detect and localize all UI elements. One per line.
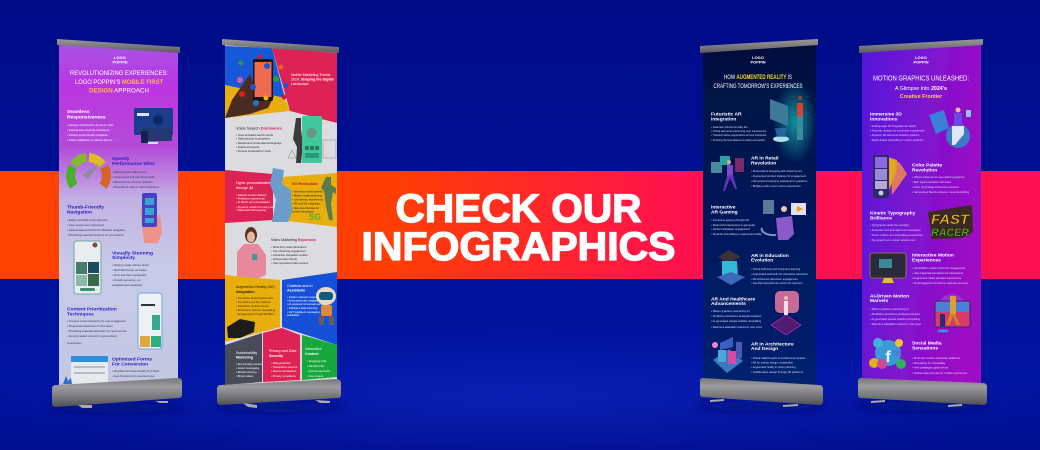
section: kinetic typography: Brilliance: [870, 216, 892, 222]
icon: speedometer gauge: [71, 158, 106, 186]
floor shadow: [48, 403, 188, 413]
panel: augmented reality integration: [225, 275, 280, 342]
title: MOTION GRAPHICS UNLEASHED:: [873, 76, 969, 82]
section: AR in education: • Virtual field trips and immersive learning: [751, 267, 801, 271]
top rail: [859, 39, 983, 53]
icon: AI motion characters: [935, 294, 970, 332]
section: interactive motion: Interactive Motion: [912, 252, 954, 258]
panel: chatbots and AI assistants: [282, 272, 337, 345]
section: interactive AR gaming: • Dynamic storytelling in augmented reality: [711, 232, 762, 236]
section: speedy performance wins: Performance Wins: [112, 161, 155, 167]
panel: sustainability marketing: • Ethical sourcing: [236, 370, 257, 374]
section: kinetic typography: Kinetic Typography: [870, 210, 916, 216]
section: kinetic typography: • Innovative font animations for messaging: [870, 228, 921, 232]
panel: chatbots and AI assistants: • Intelligent lead nurturing: [287, 306, 318, 310]
icon: AR gamer: [762, 200, 806, 240]
section: interactive motion: [912, 252, 969, 285]
section: social media sensations: • Viral challenges ignite trends: [912, 366, 949, 370]
logo: LOGO: [114, 55, 126, 60]
section: social media sensations: • Vertical video formats for mobile experiences: [912, 371, 968, 375]
section: AR and healthcare: Advancements: [711, 301, 746, 307]
section: voice search dominance: • Voice-activated search trends: [236, 133, 274, 137]
section: immersive 3D innovations: • Futuristic designs for immersive experiences: [870, 128, 925, 132]
panel: privacy and data security: Security: [269, 354, 283, 358]
section: social media sensations: Social Media: [912, 340, 942, 346]
section: video marketing expansion: • User-generated video content: [271, 261, 308, 265]
top rail: [700, 39, 818, 53]
panel: sustainability marketing: [225, 333, 264, 385]
panel: augmented reality integration: • Try-before-you-buy features: [236, 300, 272, 304]
section: AI-driven motion: • AI-generated visuals redefine storytelling: [870, 317, 921, 321]
section: AR and healthcare: • Motion graphics powered by AI: [711, 309, 750, 313]
section: seamless responsiveness: Seamless: [67, 109, 90, 115]
section: visually stunning simplicity: • Crisp and clean typography: [112, 273, 147, 277]
panel: hyper-personalization: through AI: [236, 186, 253, 190]
icon: hologram with person: [770, 96, 803, 142]
section: immersive 3D innovations: [870, 112, 925, 142]
icon: hand holding phone with app icons: [225, 54, 288, 118]
section: speedy performance wins: • Minimized use of heavy graphics: [112, 180, 153, 184]
panel: 5G revolution: • AR and VR integration: [292, 202, 321, 206]
title: CRAFTING TOMORROW'S EXPERIENCES: [714, 84, 802, 90]
teal glow: [773, 80, 817, 164]
section: immersive 3D innovations: • Dynamic 3D elements redefine graphics: [870, 133, 920, 137]
section: video marketing expansion: [271, 238, 316, 265]
section: optimized forms: Optimized Forms: [112, 356, 152, 362]
section: immersive 3D innovations: Innovations: [870, 116, 898, 122]
icon: AR architecture model: [712, 337, 743, 373]
icon: phone with content cards: [138, 293, 162, 349]
section: interactive AR gaming: • Global multiplayer engagement: [711, 227, 750, 231]
panel background: [862, 44, 981, 385]
panel: interactive content: • Live content: [307, 374, 323, 378]
panel: privacy and data security: • Privacy compliance: [271, 374, 296, 378]
panel: chatbots and AI assistants: • 24/7 intelligent messaging: [287, 310, 320, 314]
section: futuristic AR: • Pushing the boundaries of reality perception: [711, 138, 766, 142]
section: seamless responsiveness: • Designs optimized for all screen sizes: [67, 123, 114, 127]
panel: 5G revolution: 5G: [309, 212, 321, 222]
section: content prioritization: • Content-related content for personalized: [67, 334, 117, 338]
panel: 5G revolution: • New opportunities for: [292, 206, 319, 210]
section: colour palette revolution: • Bold experimentation with hues: [912, 180, 952, 184]
icon: devices: [134, 108, 173, 144]
section: futuristic AR: Integration: [711, 116, 736, 122]
logo: POPPIN: [112, 60, 128, 64]
section: AR in retail: • Bridging online and in-store experiences: [751, 184, 801, 188]
section: AR in architecture: [751, 342, 806, 374]
section: video marketing expansion: • Vertical video format: [271, 257, 297, 261]
section: social media sensations: • Storytelling for shareability: [912, 361, 946, 365]
section: AR in retail: • Augmented product displays for engagement: [751, 174, 806, 178]
panel: hyper-personalization: • Data-informed targeting: [236, 208, 266, 212]
section: kinetic typography: • Text in motion as a storytelling powerhouse: [870, 233, 924, 237]
section: thumb-friendly navigation: • User-centric menu placement: [67, 223, 104, 227]
section: colour palette revolution: Revolution: [912, 168, 937, 174]
section: immersive 3D innovations: • Depth-based storytelling in motion graphics: [870, 138, 924, 142]
section: visually stunning simplicity: Visually Stunning: [112, 250, 153, 256]
panel: interactive content: [302, 335, 337, 380]
panel: chatbots and AI assistants: Assistants: [287, 288, 305, 292]
section: AR in architecture: • Collaborative design through AR platforms: [751, 370, 804, 374]
logo: [112, 55, 128, 64]
section: voice search dominance: [236, 126, 283, 153]
section: AR and healthcare: • Predictive animations anticipate behavior: [711, 314, 762, 318]
section: speedy performance wins: • Lightning-fast loading times: [112, 170, 147, 174]
panel: 5G revolution: [280, 173, 337, 227]
section: visually stunning simplicity: • Visually appealing, yet: [112, 278, 141, 282]
section: AR in retail: Revolution: [751, 160, 776, 166]
icon: AR retail shopper: [711, 156, 744, 191]
icon: social media cluster: [869, 338, 906, 369]
icon: fast racer logo: [928, 205, 973, 239]
section: interactive motion: • Augmented reality elevates experiences: [912, 276, 962, 280]
section: AR and healthcare: [711, 296, 762, 329]
section: AR in retail: • AR-powered shopping assistants for guidance: [751, 179, 808, 183]
main heading: Landscape: [291, 82, 309, 86]
section: interactive AR gaming: Interactive: [711, 204, 736, 210]
section: content prioritization: • Focused content hierarchy for user engagement: [67, 319, 126, 323]
section: AR in retail: [751, 156, 808, 188]
section: interactive AR gaming: • Real-world interactions in gameplay: [711, 223, 756, 227]
title: [873, 76, 969, 100]
section: AI-driven motion: • Real-time adaptation based on user input: [870, 322, 921, 326]
panel: interactive content: Interactive: [305, 347, 322, 351]
panel: augmented reality integration: • Engagement through AR filters: [236, 312, 275, 316]
panel: chatbots and AI assistants: Chatbots and AI: [287, 284, 313, 288]
section: thumb-friendly navigation: Navigation: [67, 210, 92, 216]
section: AR in education: Evolution: [751, 258, 773, 264]
section: voice search dominance: • Featured snippets: [236, 145, 260, 149]
panel: 5G revolution: mobile campaigns: [292, 210, 314, 214]
section: visually stunning simplicity: [112, 250, 153, 287]
section: colour palette revolution: • Harmonious blends enhance visual storytelling: [912, 190, 970, 194]
panel: sustainability marketing: • Brand values: [236, 374, 254, 378]
panel: sustainability marketing: Marketing: [236, 356, 253, 360]
section: colour palette revolution: [912, 162, 970, 194]
headline: INFOGRAPHICS: [362, 225, 676, 269]
hero colour blocks: [225, 46, 337, 123]
section: interactive motion: • User-triggered animations for interactions: [912, 271, 964, 275]
panel: chatbots and AI assistants: • Automated user engagement: [287, 298, 323, 302]
panel background: [59, 45, 178, 385]
icon: form card: [63, 356, 108, 385]
logo: [913, 55, 929, 64]
logo: POPPIN: [913, 60, 929, 64]
panel: hyper-personalization: • Tailored content delivery: [236, 193, 267, 197]
section: voice search dominance: • Content structured for voice: [236, 149, 271, 153]
logo: LOGO: [915, 55, 927, 60]
icon: 3D figure on globe: [929, 108, 971, 148]
section: voice search dominance: • Optimizing for local queries: [236, 136, 271, 140]
section: optimized forms: [112, 356, 160, 378]
section: thumb-friendly navigation: • Prioritizing essential functions for convenience: [67, 233, 124, 237]
icon: social media cluster: f: [885, 349, 891, 366]
panel: hyper-personalization: • Dynamic content for every user: [236, 205, 275, 209]
section: colour palette revolution: • Color psychology influences emotions: [912, 185, 959, 189]
panel: augmented reality integration: • Interactive product demos: [236, 304, 269, 308]
icon: AR healthcare hologram: [771, 291, 801, 335]
title: [714, 75, 802, 90]
main heading: [291, 73, 334, 86]
panel: sustainability marketing: • Eco-friendly practices: [236, 362, 264, 366]
panel: privacy and data security: • Transparent consent: [271, 365, 297, 369]
headline: [362, 187, 676, 269]
section: AI-driven motion: • Motion graphics powered by AI: [870, 307, 909, 311]
section: AR in architecture: And Design: [751, 346, 778, 352]
orange to pink stripe: [0, 171, 1040, 279]
section: interactive AR gaming: AR Gaming: [711, 210, 738, 216]
section: AR in education: • Augmented textbooks for interactive education: [751, 272, 808, 276]
logo: [750, 55, 766, 64]
panel: hyper-personalization: • AI-driven recommendations: [236, 200, 271, 204]
section: voice search dominance: Voice Search Dominance: [236, 126, 283, 130]
panel: privacy and data security: • Data protection: [271, 361, 291, 365]
panel: hyper-personalization: • Predictive experiences: [236, 196, 265, 200]
section: AR in architecture: AR in Architecture: [751, 342, 794, 348]
section: futuristic AR: • Virtual elements enhancing user experiences: [711, 129, 767, 133]
section: colour palette revolution: Color Palette: [912, 162, 942, 168]
title: HOW AUGMENTED REALITY IS: [724, 75, 792, 81]
main heading: 2024: Shaping the Digital: [291, 78, 334, 82]
icon: robot: [316, 287, 336, 325]
section: thumb-friendly navigation: • Easily reachable touch elements: [67, 218, 108, 222]
section: voice search dominance: • Natural and conversational language: [236, 141, 282, 145]
roller base: [52, 378, 182, 407]
section: interactive motion: Experiences: [912, 258, 941, 264]
section: AI-driven motion: • Predictive animations anticipate behavior: [870, 312, 921, 316]
roll-up banner 2: mobile marketing trends: [212, 39, 348, 412]
icon: fast racer logo: FAST: [931, 211, 971, 227]
title: A Glimpse Into 2024's: [895, 86, 947, 92]
icon: phone with photo grid: [74, 241, 101, 294]
section: immersive 3D innovations: Immersive 3D: [870, 112, 902, 118]
panel: privacy and data security: Privacy and Data: [269, 349, 296, 353]
section: futuristic AR: • Seamless blend into daily life: [711, 125, 748, 129]
section: kinetic typography: • Typography as a visual narrative tool: [870, 238, 916, 242]
panel: 5G revolution: • Low-latency experiences: [292, 198, 324, 202]
section: AI-driven motion: [870, 294, 921, 326]
title: Creative Frontier: [900, 94, 942, 100]
section: AR in education: • AR-enhanced classroom engagement: [751, 277, 798, 281]
section: content prioritization: • Progressive disclosure of information: [67, 324, 113, 328]
section: speedy performance wins: Speedy: [112, 156, 130, 162]
feet: [243, 400, 330, 408]
roll-up banner 1: mobile first design: [48, 39, 188, 413]
section: content prioritization: [67, 306, 127, 345]
title: LOGO POPPIN'S MOBILE FIRST: [75, 79, 163, 86]
section: interactive AR gaming: • Immersive gaming through AR: [711, 218, 749, 222]
roller base: [217, 379, 341, 405]
roll-up banner 4: motion graphics: [852, 39, 992, 411]
icon: hand holding phone: [140, 193, 162, 243]
panel: augmented reality integration: • Immersive brand experiences: [236, 296, 274, 300]
panel: interactive content: • Engaging polls: [307, 359, 327, 363]
section: AR in education: [751, 253, 808, 285]
panel base: [225, 45, 337, 385]
icon: fast racer logo: RACER: [931, 227, 969, 239]
section: interactive motion: • Scroll-triggered animations captivate journeys: [912, 281, 969, 285]
section: visually stunning simplicity: • Striking visuals without clutter: [112, 263, 149, 267]
section: seamless responsiveness: [67, 109, 114, 142]
section: content prioritization: experiences: [67, 341, 82, 345]
section: AR in retail: • Personalized shopping with virtual try-ons: [751, 169, 803, 173]
section: seamless responsiveness: • Instant adaptation to various devices: [67, 138, 113, 142]
section: AR in retail: AR in Retail: [751, 156, 779, 162]
figure: woman with phone: [237, 227, 266, 279]
panel: 5G revolution: • Richer media streaming: [292, 194, 323, 198]
section: content prioritization: Content Prioritization: [67, 306, 117, 312]
icon: colour swatches: [873, 155, 907, 198]
section: thumb-friendly navigation: Thumb-Friendly: [67, 204, 104, 210]
section: immersive 3D innovations: • Cutting-edge 3D integration for depth: [870, 124, 916, 128]
floor shadow: [852, 401, 992, 411]
floor shadow: [694, 401, 830, 411]
figure: blue humanoid: [270, 168, 292, 222]
panel: interactive content: Content: [305, 352, 319, 356]
section: seamless responsiveness: Responsiveness: [67, 114, 106, 120]
section: AR and healthcare: AR And Healthcare: [711, 296, 755, 302]
section: AI-driven motion: AI-Driven Motion: [870, 294, 909, 300]
icon: voice search phone and person: [288, 116, 336, 163]
section: visually stunning simplicity: Simplicity: [112, 255, 135, 261]
section: AR in architecture: • AR for interior design visualization: [751, 360, 794, 364]
section: kinetic typography: [870, 210, 924, 242]
section: AR in education: AR in Education: [751, 253, 789, 259]
panel: augmented reality integration: Integration: [236, 290, 255, 294]
section: optimized forms: • Auto-fill options for seamless input: [112, 374, 155, 378]
section: video marketing expansion: • Short-form video dominance: [271, 245, 307, 249]
section: thumb-friendly navigation: • Gesture-based controls for effortless navigation: [67, 228, 126, 232]
panel: hyper-personalization: Hyper-personalization: [236, 181, 271, 185]
icon: graduation cap on book: [717, 250, 745, 285]
section: colour palette revolution: • Vibrant schemes for eye-catching graphics: [912, 175, 965, 179]
headline: CHECK OUR: [396, 187, 642, 231]
panel: chatbots and AI assistants: • AI-powered conversational tools: [287, 302, 327, 306]
section: kinetic typography: • Typography steals the spotlight: [870, 223, 909, 227]
section: futuristic AR: Futuristic AR: [711, 112, 742, 118]
section: AR and healthcare: • AI-generated visuals redefine storytelling: [711, 319, 762, 323]
top rail: [222, 39, 339, 53]
section: social media sensations: • Short-form motion dominates platforms: [912, 356, 961, 360]
floor glow: [0, 330, 1040, 450]
section: visually stunning simplicity: • Minimalist design principles: [112, 268, 147, 272]
panel: chatbots and AI assistants: availability: [287, 313, 300, 317]
panel: privacy and data security: [263, 328, 300, 382]
panel: sustainability marketing: Sustainability: [236, 351, 257, 355]
roller base: [858, 378, 987, 405]
panel: interactive content: • Gamified ads: [307, 364, 325, 368]
section: futuristic AR: [711, 112, 767, 142]
section: optimized forms: • Simplified and user-friendly form fields: [112, 369, 160, 373]
section: futuristic AR: • Transformative applications across industries: [711, 133, 767, 137]
title: [70, 70, 168, 94]
title: DESIGN APPROACH: [89, 88, 149, 94]
section: interactive motion: • Gamification meets motion for engagement: [912, 266, 965, 270]
section: AR in architecture: • Virtual walkthroughs of architectural projects: [751, 356, 806, 360]
roller base: [700, 378, 823, 405]
panel: interactive content: • Quizzes and tools: [307, 369, 331, 373]
section: speedy performance wins: • Streamlined code for swift interactions: [112, 185, 160, 189]
section: thumb-friendly navigation: [67, 204, 126, 237]
section: social media sensations: [912, 340, 968, 375]
feet: [871, 400, 962, 407]
section: optimized forms: For Conversion: [112, 362, 148, 368]
section: content prioritization: • Prioritizing essential information for quick access: [67, 329, 127, 333]
panel background: [703, 45, 816, 385]
panel: chatbots and AI assistants: • Instant customer support: [287, 295, 319, 299]
section: visually stunning simplicity: straightforward aesthetics: [112, 283, 143, 287]
section: AR in architecture: • Augmented reality in urban planning: [751, 365, 796, 369]
panel: augmented reality integration: Augmented Reality (AR): [236, 285, 275, 289]
panel: hyper-personalization: [225, 170, 275, 223]
roll-up banner 3: augmented reality: [694, 39, 830, 411]
panel: 5G revolution: • Ultra-fast mobile speeds: [292, 190, 323, 194]
section: seamless responsiveness: • Fluid layouts ensuring consistency: [67, 128, 110, 132]
section: video marketing expansion: • Live streaming engagement: [271, 249, 306, 253]
section: content prioritization: Techniques: [67, 312, 94, 318]
section: seamless responsiveness: • Intuitive touch-friendly navigation: [67, 133, 108, 137]
section: video marketing expansion: Video Marketing Expansion: [271, 238, 316, 242]
logo: LOGO: [752, 55, 764, 60]
section: video marketing expansion: • Interactive shoppable content: [271, 253, 308, 257]
title: REVOLUTIONIZING EXPERIENCES:: [70, 70, 168, 77]
floor shadow: [212, 402, 348, 412]
panel: 5G revolution: 5G Revolution: [292, 182, 318, 186]
feet: [710, 399, 798, 407]
section: AR and healthcare: • Real-time adaptation based on user input: [711, 325, 762, 329]
section: AR in education: • Gamified educational content for retention: [751, 281, 803, 285]
panel: privacy and data security: • Secure transactions: [271, 369, 297, 373]
section: speedy performance wins: • Compressed and optimized media: [112, 175, 155, 179]
panel: sustainability marketing: • Green messaging: [236, 366, 259, 370]
section: social media sensations: Sensations: [912, 346, 938, 352]
section: speedy performance wins: [112, 156, 160, 189]
panel: augmented reality integration: • Enhanced customer storytelling: [236, 308, 276, 312]
icon: monitor: [870, 253, 906, 283]
top rail: [57, 39, 180, 53]
section: AI-driven motion: Marvels: [870, 298, 888, 304]
main heading: Mobile Marketing Trends: [291, 73, 331, 77]
logo: POPPIN: [750, 60, 766, 64]
feet: [78, 401, 168, 408]
section: interactive AR gaming: [711, 204, 762, 236]
